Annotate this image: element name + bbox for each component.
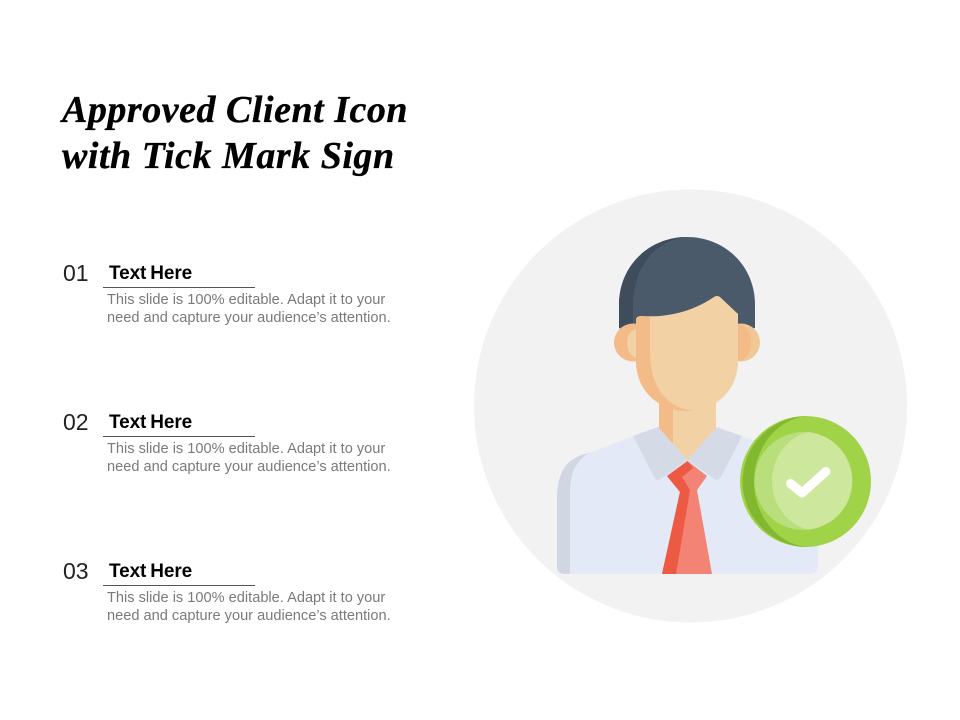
list item 01	[63, 260, 391, 326]
number 02: 02	[63, 409, 89, 435]
collar	[633, 427, 742, 480]
title	[60, 89, 408, 177]
hair	[619, 237, 755, 340]
description 01: need and capture your audience’s attention.	[107, 310, 391, 326]
description 03	[107, 590, 391, 624]
description 02	[107, 441, 391, 475]
list item 03	[63, 558, 391, 624]
description 02: This slide is 100% editable. Adapt it to your	[107, 441, 385, 457]
background circle	[474, 190, 907, 622]
face	[636, 296, 738, 411]
necktie	[662, 461, 712, 574]
number 03: 03	[63, 558, 89, 584]
title: Approved Client Icon	[62, 89, 408, 131]
neck	[659, 390, 716, 460]
description 03: This slide is 100% editable. Adapt it to your	[107, 590, 385, 606]
heading 02: Text Here	[109, 412, 192, 433]
description 03: need and capture your audience’s attention.	[107, 608, 391, 624]
heading 03: Text Here	[109, 561, 192, 582]
heading 01: Text Here	[109, 263, 192, 284]
icon: approved client	[557, 237, 871, 574]
ears	[614, 324, 760, 362]
description 01: This slide is 100% editable. Adapt it to your	[107, 292, 385, 308]
list item 02	[63, 409, 391, 475]
title: with Tick Mark Sign	[62, 135, 395, 177]
number 01: 01	[63, 260, 89, 286]
description 02: need and capture your audience’s attention.	[107, 459, 391, 475]
description 01	[107, 292, 391, 326]
badge: tick mark	[740, 416, 871, 547]
client body	[557, 427, 818, 574]
